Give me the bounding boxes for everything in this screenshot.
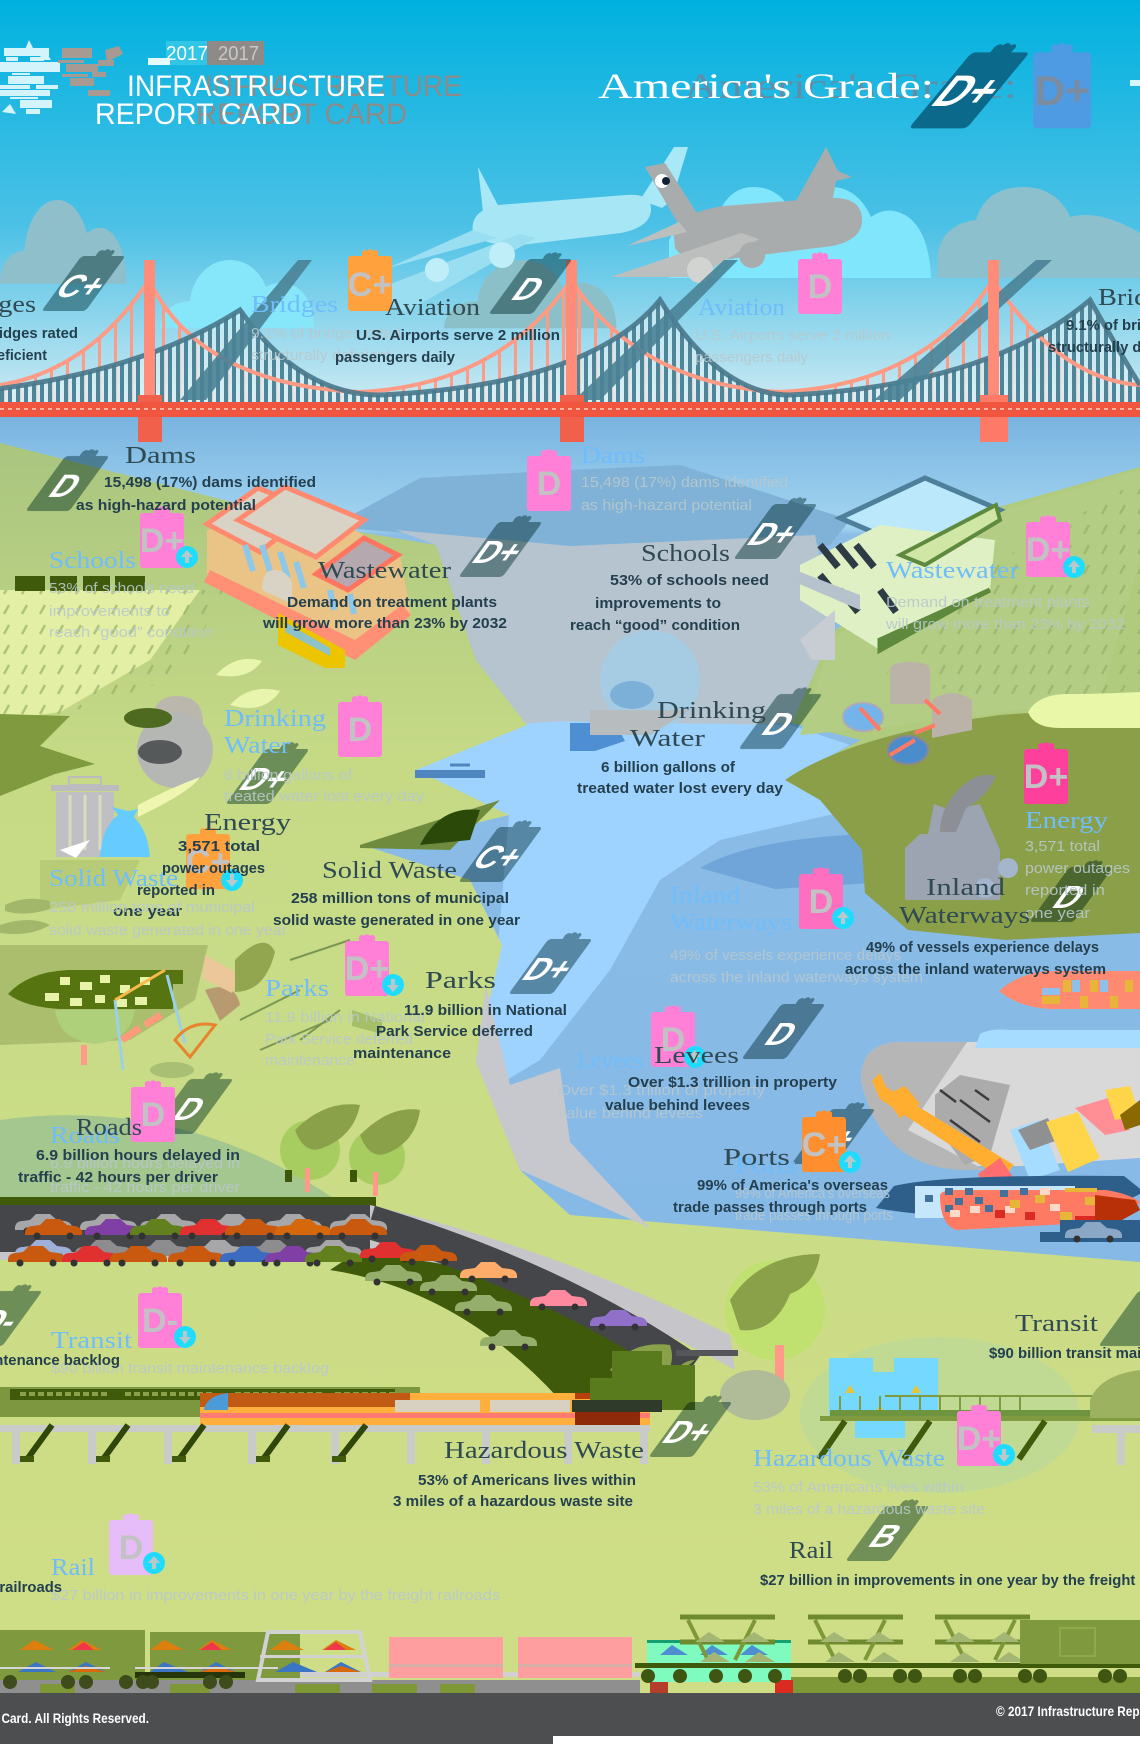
text: drinking water: Water xyxy=(224,733,290,759)
grade badges: dark sheared layer: D xyxy=(1045,879,1095,915)
text: roads: 6.9 billion hours delayed in xyxy=(36,1147,240,1164)
text: levees: value behind levees xyxy=(605,1097,750,1114)
text: levees: Over $1.3 trillion of property xyxy=(558,1082,766,1099)
text: inland waterways: across the inland waterways system xyxy=(670,969,923,986)
text: solid waste xyxy=(49,858,520,939)
text: solid waste: 258 million tons of municipal xyxy=(49,899,255,916)
logo title xyxy=(95,70,462,131)
grade badges: clipboard layer: C+ xyxy=(802,1126,846,1164)
overall grade badge: D+ xyxy=(1035,67,1089,114)
transit train olive xyxy=(0,1387,420,1417)
text: transit: Transit xyxy=(51,1328,132,1354)
text: energy: Energy xyxy=(1025,808,1108,834)
text: aviation: passengers daily xyxy=(695,349,808,366)
factory xyxy=(905,775,1018,900)
text: wastewater: Demand on treatment plants xyxy=(886,594,1090,611)
port containers xyxy=(1010,1086,1140,1180)
clouds xyxy=(0,187,1140,328)
grade badges: clipboard layer: D xyxy=(537,465,561,503)
text: inland waterways: 49% of vessels experience delays xyxy=(670,947,901,964)
text: bridges: Bridges xyxy=(251,292,338,318)
text: rail xyxy=(0,1538,1140,1604)
shore trees xyxy=(610,1254,825,1420)
grade badges: clipboard layer: D+ xyxy=(140,522,184,560)
text: ports: trade passes through ports xyxy=(735,1207,893,1224)
text: parks: Park Service deferred xyxy=(376,1023,533,1040)
stadium / camouflage hull xyxy=(8,970,183,1044)
text: energy: power outages xyxy=(162,860,265,877)
sand area xyxy=(396,530,835,730)
text: solid waste: Solid Waste xyxy=(49,866,178,892)
text: aviation: passengers daily xyxy=(335,349,456,366)
text: roads: traffic - 42 hours per driver xyxy=(18,1169,218,1186)
grade badges: clipboard layer: D xyxy=(661,1021,685,1059)
port pavement xyxy=(861,1030,1140,1170)
road hill xyxy=(0,1115,400,1260)
grade badges: clipboard layer: D- xyxy=(142,1302,178,1340)
text: energy: 3,571 total xyxy=(178,838,260,855)
text: wastewater: Demand on treatment plants xyxy=(287,594,497,611)
text: parks: Parks xyxy=(425,968,496,994)
auto rack rail cars xyxy=(0,1630,370,1689)
grade badges: dark sheared layer: D+ xyxy=(740,516,808,552)
beach xyxy=(476,985,650,1228)
text: drinking water: Drinking xyxy=(224,706,326,732)
grade badges: dark sheared layer: C+ xyxy=(465,839,533,875)
left pond area xyxy=(0,714,95,796)
right elevated rail xyxy=(819,1370,1140,1465)
right hill xyxy=(785,467,1140,803)
heading: America's Grade xyxy=(598,66,1017,106)
grade badges: dark sheared layer: D+ xyxy=(655,1414,723,1450)
grade badges: clipboard layer: D+ xyxy=(1024,758,1068,796)
text: inland waterways: across the inland waterways system xyxy=(845,961,1106,978)
traffic cars xyxy=(8,1214,417,1266)
text: inland waterways: Inland xyxy=(670,883,740,909)
water xyxy=(0,415,1140,1275)
text: ports: 99% of America's overseas xyxy=(735,1185,890,1202)
logo year badge xyxy=(148,41,264,65)
text: roads: Roads xyxy=(50,1123,120,1149)
text: bridges xyxy=(0,285,1140,364)
grade badges: dark sheared layer: D+ xyxy=(465,534,533,570)
grade badges: dark sheared layer: D xyxy=(165,1091,215,1127)
pale cloud on hill xyxy=(1028,692,1140,728)
fountain xyxy=(570,630,700,751)
text: dams: Dams xyxy=(581,443,645,469)
grade badges: dark sheared layer: D xyxy=(41,468,91,504)
text: parks: maintenance xyxy=(353,1045,451,1062)
logo year badge: 2017 xyxy=(166,43,208,65)
trend arrow icons xyxy=(143,546,1085,1574)
text: rail: $27 billion in improvements in one year by the freight railroads xyxy=(51,1587,500,1604)
logo title: REPORT CARD xyxy=(95,98,302,131)
pink boxcars xyxy=(389,1637,632,1678)
text: dams: Dams xyxy=(125,443,196,469)
right hill highlight xyxy=(800,470,1140,735)
overall grade badge xyxy=(909,43,1140,128)
olive auto rack and locomotive xyxy=(635,1617,1140,1683)
text: rail: Rail xyxy=(51,1555,95,1581)
logo year badge: 2017 xyxy=(218,43,259,65)
text: inland waterways: Waterways xyxy=(899,903,1030,929)
text: levees: Over $1.3 trillion in property xyxy=(628,1074,838,1091)
grade badges: clipboard layer: D xyxy=(141,1096,165,1134)
text: schools: improvements to xyxy=(49,603,170,620)
grade badges: clipboard layer: D+ xyxy=(345,950,389,988)
grade badges: clipboard layer: D xyxy=(119,1529,143,1567)
text: energy: reported in xyxy=(137,882,215,899)
text: bridges: structurally deficient xyxy=(251,347,392,364)
grade badges: dark sheared layer: D+ xyxy=(515,951,583,987)
text: parks: 11.9 billion in National xyxy=(265,1009,425,1026)
text: wastewater: will grow more than 23% by 2032 xyxy=(262,615,507,632)
port gantry machinery xyxy=(935,1075,1010,1165)
logo title: REPORT CARD xyxy=(196,98,407,131)
grade badges: clipboard layer: D xyxy=(348,711,372,749)
text: dams xyxy=(76,443,788,514)
text: drinking water: Drinking xyxy=(657,698,766,724)
bridge xyxy=(0,260,1140,442)
grade badges: clipboard layer xyxy=(109,249,1070,1575)
text: hazardous waste: Hazardous Waste xyxy=(444,1438,644,1464)
text: rail: Rail xyxy=(789,1538,833,1564)
text: drinking water: 6 billion gallons of xyxy=(601,759,736,776)
grade badges: dark sheared layer: D xyxy=(504,271,554,307)
river light part xyxy=(416,721,860,1090)
text: hazardous waste: Hazardous Waste xyxy=(753,1446,945,1472)
logo title: INFRASTRUCTURE xyxy=(127,70,385,103)
grade badges: clipboard layer: D+ xyxy=(957,1420,1001,1458)
olive hill xyxy=(785,705,1140,940)
text: solid waste: solid waste generated in one year xyxy=(49,922,287,939)
text: ports: 99% of America's overseas xyxy=(697,1177,888,1194)
text: hazardous waste: 53% of Americans lives within xyxy=(418,1472,636,1489)
text: hazardous waste: 53% of Americans lives within xyxy=(753,1479,964,1496)
text: solid waste: Solid Waste xyxy=(322,858,457,884)
grade badges: dark sheared layer: D xyxy=(754,706,804,742)
grade badges: dark sheared layer: B xyxy=(861,1518,911,1554)
text: ports: Ports xyxy=(723,1145,790,1171)
grade badges: dark sheared layer xyxy=(0,249,1140,1561)
grade badges: dark sheared layer: C+ xyxy=(48,268,116,304)
teal car carrier xyxy=(647,1640,793,1694)
text: levees: Levees xyxy=(654,1043,739,1069)
left land xyxy=(0,443,1140,1693)
text: inland waterways: Inland xyxy=(926,875,1005,901)
airplane: light version xyxy=(370,147,688,312)
text: aviation: Aviation xyxy=(385,295,480,321)
port crane xyxy=(872,1073,1015,1198)
text: aviation: U.S. Airports serve 2 million xyxy=(695,327,890,344)
text: energy: one year xyxy=(113,903,182,920)
text: transit: $90 billion transit maintenance backlog xyxy=(51,1360,329,1377)
text: wastewater: will grow more than 23% by 2032 xyxy=(885,616,1125,633)
text: dams: as high-hazard potential xyxy=(76,497,256,514)
text: dams: 15,498 (17%) dams identified xyxy=(581,474,788,491)
upper salmon container ship xyxy=(999,971,1140,1009)
water tower illustration xyxy=(124,659,280,788)
text: ports xyxy=(673,1145,893,1224)
text: aviation: Aviation xyxy=(698,295,785,321)
text: parks: Park Service deferred xyxy=(265,1031,413,1048)
curved road cars xyxy=(365,1245,647,1350)
river dark pool xyxy=(700,833,915,889)
text: levees: value behind levees xyxy=(558,1105,703,1122)
text: transit: Transit xyxy=(1015,1311,1098,1337)
text: drinking water: treated water lost every day xyxy=(577,780,784,797)
text: aviation xyxy=(335,295,890,366)
text: roads xyxy=(18,1115,240,1196)
text: schools xyxy=(49,541,769,641)
cyan hazardous barrels xyxy=(829,1358,938,1438)
text: schools: 53% of schools need xyxy=(610,572,769,589)
text: solid waste: solid waste generated in one year xyxy=(273,912,520,929)
text: parks: maintenance xyxy=(265,1052,355,1069)
text: inland waterways: 49% of vessels experience delays xyxy=(866,939,1099,956)
school bus xyxy=(278,613,345,668)
text: energy: reported in xyxy=(1025,882,1105,899)
grade badges: clipboard layer: C+ xyxy=(348,266,392,304)
transit train orange xyxy=(200,1393,655,1432)
grade badges: clipboard layer: D+ xyxy=(1026,531,1070,569)
lower hill band xyxy=(0,945,208,1045)
text: roads: traffic - 42 hours per driver xyxy=(50,1179,240,1196)
trash can and bag xyxy=(0,777,200,934)
grade badges: dark sheared layer: D+ xyxy=(232,761,300,797)
text: energy: one year xyxy=(1025,905,1090,922)
text: schools: 53% of schools need xyxy=(49,580,194,597)
text: energy: 3,571 total xyxy=(1025,838,1100,855)
text: ports: Ports xyxy=(735,1153,797,1179)
grade badges: clipboard layer: C+ xyxy=(186,843,230,881)
green office building xyxy=(790,478,1000,660)
transit hill xyxy=(800,1337,1080,1493)
text: dams: 15,498 (17%) dams identified xyxy=(104,474,316,491)
text: parks: Parks xyxy=(265,976,329,1002)
dark fence stripes xyxy=(15,576,145,591)
sky background xyxy=(0,0,1140,415)
text: aviation: U.S. Airports serve 2 million xyxy=(356,327,560,344)
text: drinking water: 6 billion gallons of xyxy=(224,767,353,784)
playground xyxy=(84,940,382,1078)
text: levees: Levees xyxy=(577,1048,643,1074)
text: schools: improvements to xyxy=(595,595,721,612)
text: hazardous waste: 3 miles of a hazardous waste site xyxy=(393,1493,633,1510)
grade badges: clipboard layer: D xyxy=(809,883,833,921)
footer copyright xyxy=(0,1704,1140,1726)
road xyxy=(0,1197,735,1400)
airplane: gray version xyxy=(611,147,862,283)
text: schools: Schools xyxy=(641,541,730,567)
footer bar xyxy=(0,1693,1140,1744)
text: wastewater xyxy=(262,558,1125,633)
right hill dashes xyxy=(880,480,1140,700)
text: inland waterways: Waterways xyxy=(670,910,792,936)
elevated rail columns xyxy=(0,1425,650,1464)
text: drinking water: treated water lost every day xyxy=(224,788,425,805)
text: parks: 11.9 billion in National xyxy=(404,1002,567,1019)
text: schools: reach “good” condition xyxy=(49,624,213,641)
pipes and discs xyxy=(843,662,972,764)
lower container ship xyxy=(876,1176,1140,1242)
text: roads: Roads xyxy=(76,1115,142,1141)
text: solid waste: 258 million tons of municipal xyxy=(291,890,509,907)
text: bridges: 9.1% of bridges rated xyxy=(251,325,401,342)
text: energy: Energy xyxy=(204,810,291,836)
text: drinking water xyxy=(224,698,784,805)
text: energy xyxy=(113,808,1130,922)
text: ports: trade passes through ports xyxy=(673,1199,867,1216)
text: energy: power outages xyxy=(1025,860,1130,877)
school building xyxy=(204,487,411,660)
text: schools: reach “good” condition xyxy=(570,617,740,634)
left meadow dashes xyxy=(0,590,230,720)
heading: America's Grade: America's Grade: xyxy=(684,66,1017,106)
text: inland waterways xyxy=(670,875,1106,986)
text: parks xyxy=(265,968,567,1069)
text: transit xyxy=(0,1311,1140,1377)
heading: America's Grade: America's Grade: xyxy=(598,66,934,106)
text: wastewater: Wastewater xyxy=(318,558,451,584)
far mountains xyxy=(330,465,850,546)
text: schools: Schools xyxy=(49,548,136,574)
logo map icon xyxy=(0,40,123,114)
park trees xyxy=(280,1104,420,1196)
grade badges: dark sheared layer: C+ xyxy=(798,1121,866,1157)
text: levees xyxy=(558,1043,838,1122)
text: roads: 6.9 billion hours delayed in xyxy=(50,1155,240,1172)
text: hazardous waste xyxy=(393,1438,985,1518)
pale hatched meadow left xyxy=(0,590,200,720)
grade badges: clipboard layer: D xyxy=(808,268,832,306)
text: hazardous waste: 3 miles of a hazardous waste site xyxy=(753,1501,985,1518)
text: wastewater: Wastewater xyxy=(886,558,1019,584)
overall grade badge: D+ xyxy=(920,66,1017,116)
landfill bush xyxy=(360,765,500,850)
text: dams: as high-hazard potential xyxy=(581,497,752,514)
logo title: INFRASTRUCTURE xyxy=(205,70,462,103)
bottom ground and rail xyxy=(0,1672,1140,1694)
dark hazardous barrels xyxy=(572,1350,738,1412)
grade badges: dark sheared layer: D xyxy=(757,1016,807,1052)
text: drinking water: Water xyxy=(630,726,705,752)
